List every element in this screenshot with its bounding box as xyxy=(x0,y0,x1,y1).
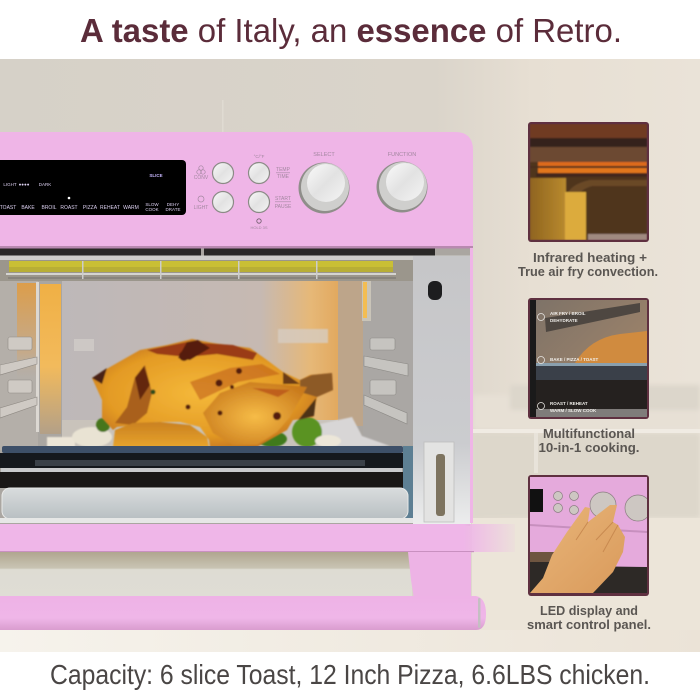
display: DEHY xyxy=(167,202,179,207)
hand xyxy=(530,505,625,593)
glow strip xyxy=(40,284,61,434)
lower wing xyxy=(113,422,209,447)
knobs: FUNCTION xyxy=(388,152,416,158)
feature 2 thumbnail: BAKE / PIZZA / TOAST xyxy=(550,357,599,362)
display: REHEAT xyxy=(100,205,120,211)
buttons: TIME xyxy=(277,174,290,180)
thigh xyxy=(203,382,307,445)
display: TOAST xyxy=(0,205,16,211)
sides on tray xyxy=(47,417,390,447)
feature 3 caption: smart control panel. xyxy=(527,617,651,632)
crumb tray xyxy=(2,488,408,519)
door handle xyxy=(0,596,486,630)
display: SLICE xyxy=(149,173,163,178)
buttons: HOLD 3S xyxy=(250,225,268,230)
display: PIZZA xyxy=(83,205,98,211)
display: LIGHT xyxy=(3,182,17,187)
display: BROIL xyxy=(41,205,57,211)
side wall left xyxy=(0,280,38,450)
footer band xyxy=(0,652,700,700)
feature 3 caption xyxy=(527,603,651,632)
feature 3 thumbnail xyxy=(528,475,651,596)
feature 2 caption: 10-in-1 cooking. xyxy=(538,440,640,455)
feature 2 thumbnail: WARM / SLOW COOK xyxy=(550,408,597,413)
buttons: °C/°F xyxy=(254,154,265,159)
buttons: PAUSE xyxy=(275,204,292,210)
glaze spots xyxy=(179,351,281,420)
buttons: CONV xyxy=(194,175,209,181)
buttons xyxy=(194,154,292,230)
feature 1 caption: Infrared heating + xyxy=(533,250,647,265)
feature 3 caption: LED display and xyxy=(540,603,638,618)
buttons: START xyxy=(275,196,291,202)
feature 2 thumbnail xyxy=(528,298,649,419)
oven control panel xyxy=(0,132,473,248)
feature 1 caption xyxy=(518,250,658,279)
display: WARM xyxy=(123,205,139,211)
knobs xyxy=(298,152,428,214)
side wall right xyxy=(363,281,413,445)
display: COOK xyxy=(145,207,159,212)
title: A taste of Italy, an essence of Retro. xyxy=(80,12,622,49)
display: ROAST xyxy=(60,205,78,211)
feature 2 thumbnail: ROAST / REHEAT xyxy=(550,401,588,406)
roast chicken xyxy=(92,339,333,447)
feature 2 caption xyxy=(538,426,640,455)
display xyxy=(0,160,186,215)
feature 2 thumbnail: DEHYDRATE xyxy=(550,318,578,323)
display: ●●●● xyxy=(19,182,30,187)
feature 1 caption: True air fry convection. xyxy=(518,264,658,279)
buttons: LIGHT xyxy=(194,205,208,211)
back wall xyxy=(62,281,338,426)
top heater rack xyxy=(0,260,413,281)
oven door xyxy=(0,524,515,630)
feature 2 thumbnail: AIR FRY / BROIL xyxy=(550,311,586,316)
display: BAKE xyxy=(21,205,35,211)
knobs: SELECT xyxy=(313,152,335,158)
upper wing xyxy=(115,365,152,425)
display: SLOW xyxy=(145,202,159,207)
display: DRATE xyxy=(166,207,180,212)
buttons: TEMP xyxy=(276,167,291,173)
right pillar xyxy=(413,256,471,524)
feature 2 caption: Multifunctional xyxy=(543,426,635,441)
door hinge xyxy=(408,552,471,599)
oven cavity xyxy=(0,246,473,526)
header band xyxy=(0,0,700,59)
display: DARK xyxy=(39,182,51,187)
feature 1 thumbnail xyxy=(528,122,649,242)
baking tray and rack xyxy=(0,446,413,523)
